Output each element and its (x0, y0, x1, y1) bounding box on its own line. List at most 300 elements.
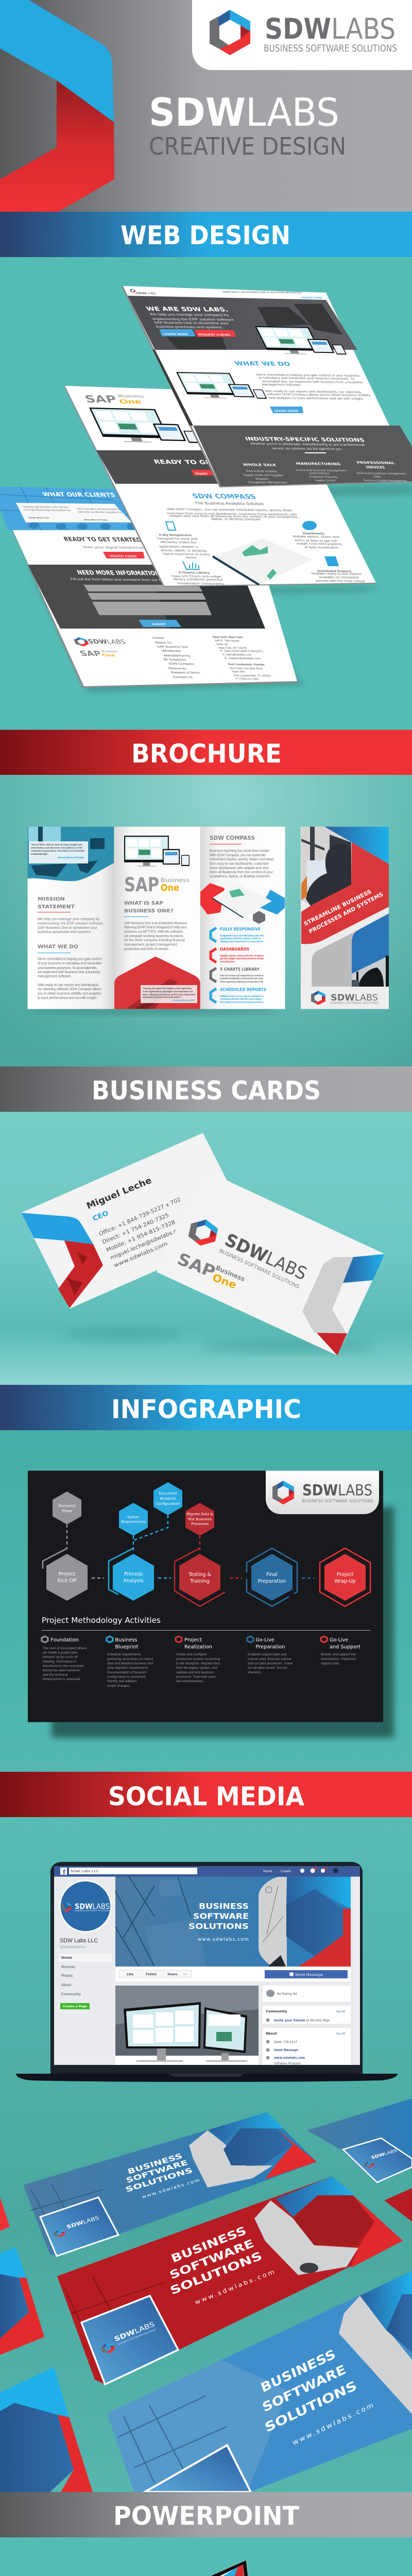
feature list: SCHEDULED REPORTS (220, 987, 266, 992)
web page 2: phone, tablet, or desktop. (160, 549, 209, 552)
business card front: SDWLABS (221, 1230, 310, 1284)
activity columns: transferred to the consultant (43, 1664, 84, 1668)
project phase hexagons (43, 1548, 370, 1606)
logo tab (266, 1471, 379, 1514)
brochure inside middle panel: Business (161, 877, 190, 884)
project phase hexagons: Project (337, 1572, 354, 1578)
web page 3: 445 E. 78th Street (214, 639, 240, 642)
social banner: red: SOLUTIONS (168, 2249, 264, 2297)
web page 2: SDW COMPASS (191, 493, 257, 500)
brochure inside left panel: "We've been able to start driving insight into (31, 843, 82, 846)
web page 3: "Having the right information, at the right time, (22, 506, 70, 509)
web page 3: P: (754) 231-1861 (235, 677, 260, 681)
activity columns: from the legacy system, and (176, 1666, 217, 1670)
brochure inside middle panel: production and field of service. (124, 947, 169, 951)
web page 3: Suite 300 (231, 670, 246, 673)
activity columns: processes. Train end-users (176, 1675, 216, 1679)
activity columns: followed up by a kick off (43, 1655, 78, 1659)
cover slogan: PROCESSES AND SYSTEMS (308, 891, 384, 935)
logo tab: SDWLABS (265, 12, 396, 45)
web page 2: laptop, or desktop computer. (210, 517, 263, 521)
activity columns: we create a project plan (42, 1651, 78, 1655)
social banner: blue small: SOFTWARE (125, 2159, 189, 2184)
hero band: LEARN MORE (163, 333, 189, 336)
feature list (211, 927, 266, 1004)
card shadow (62, 1330, 376, 1351)
activity columns: and administrators. (176, 1680, 204, 1683)
activity columns: The start of the project where (43, 1647, 87, 1650)
project phase hexagons: Wrap-Up (334, 1579, 356, 1584)
hero band (128, 296, 357, 355)
brochure inside left panel: customers transactions. The return on investment (31, 850, 84, 853)
sidebar cards: (844) 739-5227 (274, 2041, 298, 2044)
web page 2: widgets and view them all flawlessly from the comfort of your smartphone, (168, 514, 300, 519)
web page 3: Manufacturing (163, 654, 191, 657)
SAP logo (83, 394, 145, 405)
industry solutions band: Production Planning, (309, 476, 339, 479)
sidebar cards: www.sdwlabs.com (274, 2057, 305, 2060)
brochure inside right panel: Business reporting has never been easier. (210, 850, 270, 853)
web page 2: 5 Charts Library (178, 571, 211, 574)
social banner: blue small: www.sdwlabs.com (142, 2178, 200, 2199)
web page 3: Resources (167, 667, 187, 670)
sidebar cards: No Rating Yet (277, 1993, 298, 1996)
project phase hexagons: Preparation (258, 1579, 286, 1584)
profile sidebar: SDW Labs LLC (60, 1938, 98, 1944)
business card back: miguel.leche@sdwlabs.com (110, 1224, 186, 1261)
profile sidebar: Home (61, 1956, 73, 1960)
web page 3: Wholesale (161, 649, 182, 653)
sidebar cards: Invite your friends to like this Page (274, 2020, 330, 2023)
laptop screen (52, 2560, 262, 2576)
brochure inside middle panel: Planning (ERP) that is designed to help your (124, 926, 187, 929)
web page 2: device (185, 556, 197, 560)
brochure inside left panel: –Brenda Wilson, VP of Sales (57, 856, 84, 859)
profile picture (60, 1880, 111, 1932)
laptop (52, 2560, 364, 2576)
web page 3: Request a Demo (170, 671, 201, 674)
industry solutions band: Management (255, 478, 269, 481)
brochure inside left panel: to track performance and act with insight. (38, 996, 97, 1000)
feature list: Data rich charts and widget library combines (220, 974, 264, 977)
section banner: brochure: BROCHURE (131, 739, 282, 769)
activity columns: Realization (184, 1645, 212, 1650)
brochure inside right panel: With SDW Compass, you can automate (210, 854, 266, 857)
feature list: Designed for ease and efficiently scales the (220, 935, 264, 938)
social banner: red: BUSINESS SOFTWARE SOLUTIONS (117, 2328, 157, 2346)
web page 2: KPI's of data to get rich (294, 539, 338, 543)
web page 3: Fort Lauderdale, Florida (228, 663, 265, 666)
brochure inside left panel: WHAT WE DO (38, 944, 78, 950)
activity columns: Go-Live (255, 1637, 274, 1643)
brochure inside middle panel: WHAT IS SAP (124, 901, 163, 906)
social banner: red: www.sdwlabs.com (194, 2268, 275, 2306)
activity columns: meeting. Information is (43, 1660, 76, 1664)
red building image (114, 956, 200, 1009)
web page 2: Multiple reports, charts and (291, 535, 340, 538)
panel: web design mockups (0, 257, 412, 730)
industry solutions band: Supplier Control (314, 479, 336, 482)
sidebar cards: Send Message (274, 2049, 298, 2052)
web page 3 (0, 486, 299, 688)
icon: phone (166, 522, 176, 530)
red building image: – George Johnson, CEO (171, 999, 195, 1002)
what we do: accomplish this, we implement SAP Business One, a business (261, 380, 364, 384)
title: SDWLABS (149, 90, 339, 135)
brochure inside right panel: them all flawlessly from the comfort of your (210, 871, 273, 874)
project phase hexagons: Analysis (123, 1578, 144, 1584)
web page 3: New York, NY 10075 (218, 647, 248, 650)
brochure inside right panel: SDW COMPASS (210, 835, 255, 841)
web page 3: 501 East Las Olas Blvd (229, 667, 263, 670)
feature list: get rich insight. Uses best practices of data (220, 957, 264, 960)
small phase hexagons: Test Businees (187, 1517, 212, 1521)
profile sidebar (59, 1938, 112, 2009)
section banner: social media: SOCIAL MEDIA (108, 1782, 304, 1811)
industry solutions band: Whether you're in wholesale, manufacturing or are a professional (249, 442, 366, 447)
feature list: information on every key business process. (220, 1001, 264, 1004)
profile picture: SDWLABS (75, 1903, 110, 1911)
SAP logo: Business (117, 394, 145, 398)
small phase hexagons: Discovery (58, 1504, 76, 1508)
business card front: SAP (175, 1249, 218, 1282)
panel: brochure (0, 775, 412, 2576)
action bar: ··· (183, 1973, 187, 1976)
activity columns: production system according (176, 1657, 220, 1661)
business card back: Mobile: +1 954-815-7328 (106, 1219, 176, 1253)
activity columns: checklist. (248, 1671, 262, 1674)
brochure inside right panel: smartphone, laptop, or desktop computer. (210, 875, 270, 878)
top nav: REQUEST A DEMO (302, 297, 323, 299)
profile sidebar: Create a Page (63, 2005, 87, 2008)
web page 3: SDWLABS (87, 638, 127, 646)
project phase hexagons: Training (190, 1579, 210, 1584)
web page 3: READY TO GET STARTED (62, 536, 143, 543)
web page 3: Business (100, 650, 119, 653)
web page 3: About Us (154, 641, 173, 645)
brochure inside left panel: We help you manage your company by (38, 918, 100, 921)
social banner: blue small: SDWLABS (66, 2215, 100, 2230)
what we do (176, 360, 371, 413)
cover photo (115, 1876, 351, 1967)
activity columns: Blueprint (115, 1645, 139, 1650)
web page 3: Home (151, 636, 165, 640)
brochure shadow (31, 1007, 278, 1015)
brochure inside left panel: we implement SAP Business One, a business (37, 971, 101, 974)
cover photo: BUSINESS (199, 1902, 249, 1911)
activity columns: data and detailed business and (107, 1662, 153, 1665)
small phase hexagons: Migrate Data & (186, 1512, 214, 1516)
web page 3: SAP Business One (156, 645, 189, 649)
cover photo: www.sdwlabs.com (198, 1937, 249, 1942)
web page 2: Same experience on every (162, 552, 211, 556)
feature list: applications whether a phone, tablet, or (220, 937, 261, 940)
small phase hexagons: Document (159, 1492, 177, 1496)
activity columns: and the technical (43, 1673, 67, 1676)
connectors (67, 1515, 314, 1578)
icon: calendar (324, 556, 339, 566)
web page 3: WHAT OUR CLIENTS (41, 491, 116, 498)
web page 3: Brenda Wilson, VP of Sales (84, 519, 108, 521)
small phase hexagons: Requirements (121, 1520, 146, 1524)
business card back: Office: +1 844-739-5227 x 702 (98, 1196, 182, 1238)
web page 3: One (101, 653, 116, 657)
activity columns: scope changes. (107, 1684, 130, 1688)
web page 3: NEED MORE INFORMATION (76, 569, 161, 577)
feature list: driven approach, helping you bring data to life. (220, 980, 264, 984)
hero band: implementing the ERP solution software (151, 317, 235, 321)
web page 2: overviews from easy-to-use dashboards, customize those dashboards with (166, 512, 298, 516)
profile sidebar: @sdwlabsllc (60, 1945, 86, 1949)
logo tab (192, 0, 412, 70)
industry solutions band: SERVICES (365, 466, 386, 470)
activity columns: support plan. (321, 1662, 340, 1665)
industry solutions band: Goods Distribution (308, 472, 331, 475)
post image (115, 1986, 259, 2065)
icon: ribbon graphic (0, 0, 114, 212)
sidebar cards: Community (266, 2009, 287, 2013)
industry solutions band: WHOLE SALE (242, 463, 277, 467)
brochure inside middle panel: BUSINESS ONE? (124, 908, 174, 914)
brochure inside left panel (28, 827, 114, 1009)
web page 3: SAP (78, 649, 103, 658)
web page 3: information and discover new patterns in (78, 511, 123, 514)
web page 2: periods with the most critical (315, 579, 366, 583)
activity columns: Establish support plan and (248, 1653, 287, 1656)
brochure inside left panel: our reporting software SDW Compass allows (38, 988, 102, 991)
section banner: powerpoint (0, 2492, 412, 2537)
activity columns: cutover plan. Execute cutover (248, 1657, 292, 1661)
activity columns: Monitor and support live (321, 1653, 356, 1656)
activity columns: infrastructure is assessed. (43, 1677, 81, 1681)
activity columns: Preparation (255, 1645, 285, 1650)
feature list: Multiple ready-to-use reports available on (220, 995, 264, 998)
social banner: red: SDWLABS (113, 2320, 156, 2343)
cover photo: SOLUTIONS (188, 1922, 249, 1931)
brochure inside right panel: those dashboards with widgets and view (210, 867, 269, 870)
what we do: LEARN MORE (273, 410, 299, 413)
social banner: blue large (107, 2271, 412, 2492)
business card front: One (211, 1271, 238, 1291)
web page 2: With SDW Compass, you can automate scheduled reports, quickly obtain (166, 507, 294, 512)
activity columns: Documentation of blueprint (107, 1671, 147, 1674)
panel: business cards (0, 1112, 412, 1385)
brochure inside middle panel: we integrate working business functions (124, 935, 184, 938)
hero band: REQUEST A DEMO (198, 333, 231, 336)
header panel (0, 0, 412, 212)
laptop with facebook page (16, 1862, 398, 2082)
web page 3: Start your digital transformation (82, 545, 151, 550)
cover logo (311, 991, 379, 1005)
business card front: BUSINESS SOFTWARE SOLUTIONS (218, 1248, 300, 1290)
web page 3: SUBMIT (151, 623, 167, 626)
what we do: or subsidiary and streamline your business processes. To (258, 376, 355, 380)
sidebar cards (263, 1986, 351, 2065)
social banner: blue small: SOLUTIONS (124, 2166, 194, 2194)
section banner: web design: WEB DESIGN (121, 221, 290, 250)
title (149, 90, 346, 160)
logo tab: SDWLABS (302, 1481, 372, 1499)
activity columns (42, 1636, 360, 1688)
web page 3: REQUEST A DEMO (109, 555, 138, 558)
web page 2: Scheduled Reports (316, 569, 352, 573)
what we do: and analytics to track performance and act with insight. (268, 396, 365, 400)
brochure inside right panel: scheduled reports, quickly obtain overviews (210, 858, 274, 861)
small phase hexagons (53, 1482, 214, 1536)
cover photo: SOFTWARE (193, 1911, 249, 1921)
social banner: top right partial (307, 2098, 412, 2222)
social banner: blue large: BUSINESS (259, 2347, 337, 2396)
web page 3: P: (844) SDW-LABS (739-5227) (220, 650, 264, 653)
brochure inside middle panel: management, project management, (124, 943, 178, 947)
web page 3: SDW Compass (167, 662, 195, 666)
industry solutions band: End-to-End Visibility (246, 470, 278, 473)
industry solutions band: Chargeback Management (247, 481, 288, 484)
brochure inside left panel: With ready to use reports and dashboards, (38, 984, 99, 987)
web page 2: of data visualization (303, 546, 339, 549)
red building image: "Having the right information, at the right time, (143, 987, 193, 990)
small phase hexagons: Configuration (156, 1502, 180, 1506)
small phase hexagons: Blueprint (160, 1497, 176, 1501)
activity columns: Foundation (50, 1637, 79, 1643)
activities heading: Project Methodology Activities (42, 1616, 161, 1625)
panel: social media (0, 1817, 412, 2492)
business card back (21, 1133, 251, 1309)
section banner: business cards (0, 1066, 412, 1112)
brochure inside left panel: is extremely high." (31, 853, 48, 856)
project phase hexagons: Project (59, 1571, 76, 1577)
web page 3: in the right format leverages and empowers our (24, 509, 71, 512)
section banner: social media (0, 1772, 412, 1818)
brochure inside left panel: you to obtain business visibility and analytics (38, 992, 102, 995)
business card back: Miguel Leche (85, 1175, 153, 1212)
social banner: red (57, 2176, 403, 2384)
feature list: FULLY RESPONSIVE (220, 927, 261, 931)
brochure inside left panel: business processes and systems. (38, 930, 92, 934)
brochure inside middle panel (114, 827, 200, 1009)
project phase hexagons: Final (266, 1572, 278, 1578)
business card back: Direct: +1 754-240-7325 (101, 1212, 170, 1245)
top nav: HOME ABOUT SAP BUSINESS ONE BI SOLUTIONS RESOURCES (222, 291, 303, 294)
web page 2: library combines powerful (173, 578, 224, 581)
activity columns: and Support (330, 1645, 360, 1650)
cover photo (301, 827, 351, 906)
feature list: 5 CHARTS LIBRARY (220, 967, 260, 972)
page shadows (31, 484, 412, 692)
action bar: Follow (146, 1973, 157, 1976)
section banner: business cards: BUSINESS CARDS (92, 1076, 321, 1106)
small phase hexagons: Phase (62, 1509, 72, 1513)
brochure inside middle panel: One (161, 883, 179, 893)
business card front (157, 1170, 385, 1355)
web page 3: Suite 2A (216, 643, 229, 646)
industry solutions band: CRM (373, 476, 382, 479)
web page 3: "We've been able to start driving insight into (77, 508, 121, 511)
cover slogan: STREAMLINE BUSINESS (303, 889, 372, 927)
sidebar cards: See All (336, 2010, 345, 2013)
sidebar cards: Software Program (274, 2062, 301, 2065)
section banner: web design (0, 212, 412, 257)
social banner: red: BUSINESS (169, 2224, 248, 2265)
web page 3: E: support@sdwlabs.com (224, 657, 262, 660)
what we do: With ready to use reports and dashboards, our reporting (264, 389, 362, 394)
industry solutions band: End-to-end business management (295, 469, 347, 472)
dark panel shadow (52, 1507, 394, 1738)
social banner: blue large: SOFTWARE (261, 2362, 348, 2415)
section banner: infographic (0, 1385, 412, 1430)
profile sidebar: Community (61, 1992, 81, 1996)
hero band: We help you manage your company by (149, 312, 230, 317)
social banner: top right partial: SDWLABS (371, 2148, 398, 2160)
section banner: infographic: INFOGRAPHIC (111, 1394, 301, 1424)
brochure inside left panel: MISSION (38, 896, 65, 902)
social banner left partials (0, 2197, 93, 2492)
panel: powerpoint (0, 2537, 412, 2576)
activity columns: and run pilot processes. Close (248, 1662, 293, 1665)
what we do: management software. (261, 383, 302, 386)
web page 2: Designed for ease and (156, 537, 198, 540)
action bar: Like (127, 1973, 133, 1976)
web page 2: applications whether a (158, 545, 199, 549)
brochure inside left panel: your business processes. To accomplish this, (38, 967, 97, 970)
SAP logo: One (118, 398, 142, 405)
brochure inside right panel: from easy-to-use dashboards, customize (210, 862, 269, 866)
panel: infographic (0, 1430, 412, 1772)
social banner: red: SOFTWARE (167, 2236, 256, 2282)
SAP logo: SAP (83, 394, 118, 405)
industry solutions band: MANUFACTURING (295, 462, 341, 466)
web page 2: Data rich Charts and widget (170, 574, 223, 578)
brochure inside middle panel: SAP Business One is an Enterprise Resource (124, 922, 187, 925)
brochure inside middle panel: business run BETTER. With this software, (124, 930, 183, 934)
feature list: powerful visualization components and a data- (220, 977, 264, 980)
brochure cover (301, 827, 389, 1009)
facebook header: Create (281, 1870, 291, 1873)
brochure inside left panel: of your business or subsidiary and streamline (38, 962, 102, 965)
web page 3: Fort Lauderdale, FL 33301 (233, 674, 272, 677)
facebook header (54, 1866, 360, 1876)
dark infographic board (28, 1471, 383, 1722)
profile sidebar: About (61, 1983, 72, 1987)
cover logo: SDWLABS (331, 993, 378, 1003)
sidebar cards: About (266, 2031, 277, 2036)
web page 2: The Business Analytics Solution (194, 501, 265, 506)
activity columns: gathering workshops to collect (107, 1657, 153, 1661)
web page 2: READY TO GET (152, 459, 217, 466)
brochure inside left panel: We're committed to helping you gain control (38, 957, 101, 961)
activity columns: Business (115, 1637, 138, 1643)
web page 2: efficiently scales the (159, 540, 197, 544)
social banner: blue small: BUSINESS (126, 2152, 184, 2176)
industry solutions band: Supply Chain and Supplier (243, 474, 284, 477)
social banner: blue large: www.sdwlabs.com (292, 2402, 374, 2447)
red building image: team. Allowing us to focus on the most critical and (143, 993, 195, 996)
dashboard image (213, 538, 313, 585)
brochure inside middle panel: for the entire company including financial (124, 939, 185, 942)
web page 1 (122, 286, 412, 487)
web page 2: Visualization components (176, 582, 225, 585)
feature list: DASHBOARDS (220, 947, 249, 952)
business card front: Business (215, 1264, 246, 1283)
facebook header: f (63, 1868, 65, 1876)
activity columns: Go-Live (330, 1637, 348, 1643)
industry solutions band: PROFESSIONAL (356, 461, 396, 465)
activity columns: to the blueprint. Migrate data (176, 1662, 220, 1665)
feature list: scheduled periods with the most critical (220, 998, 261, 1001)
action bar: Share (167, 1973, 177, 1976)
action bar (115, 1967, 351, 1981)
profile sidebar: Reviews (61, 1965, 76, 1969)
